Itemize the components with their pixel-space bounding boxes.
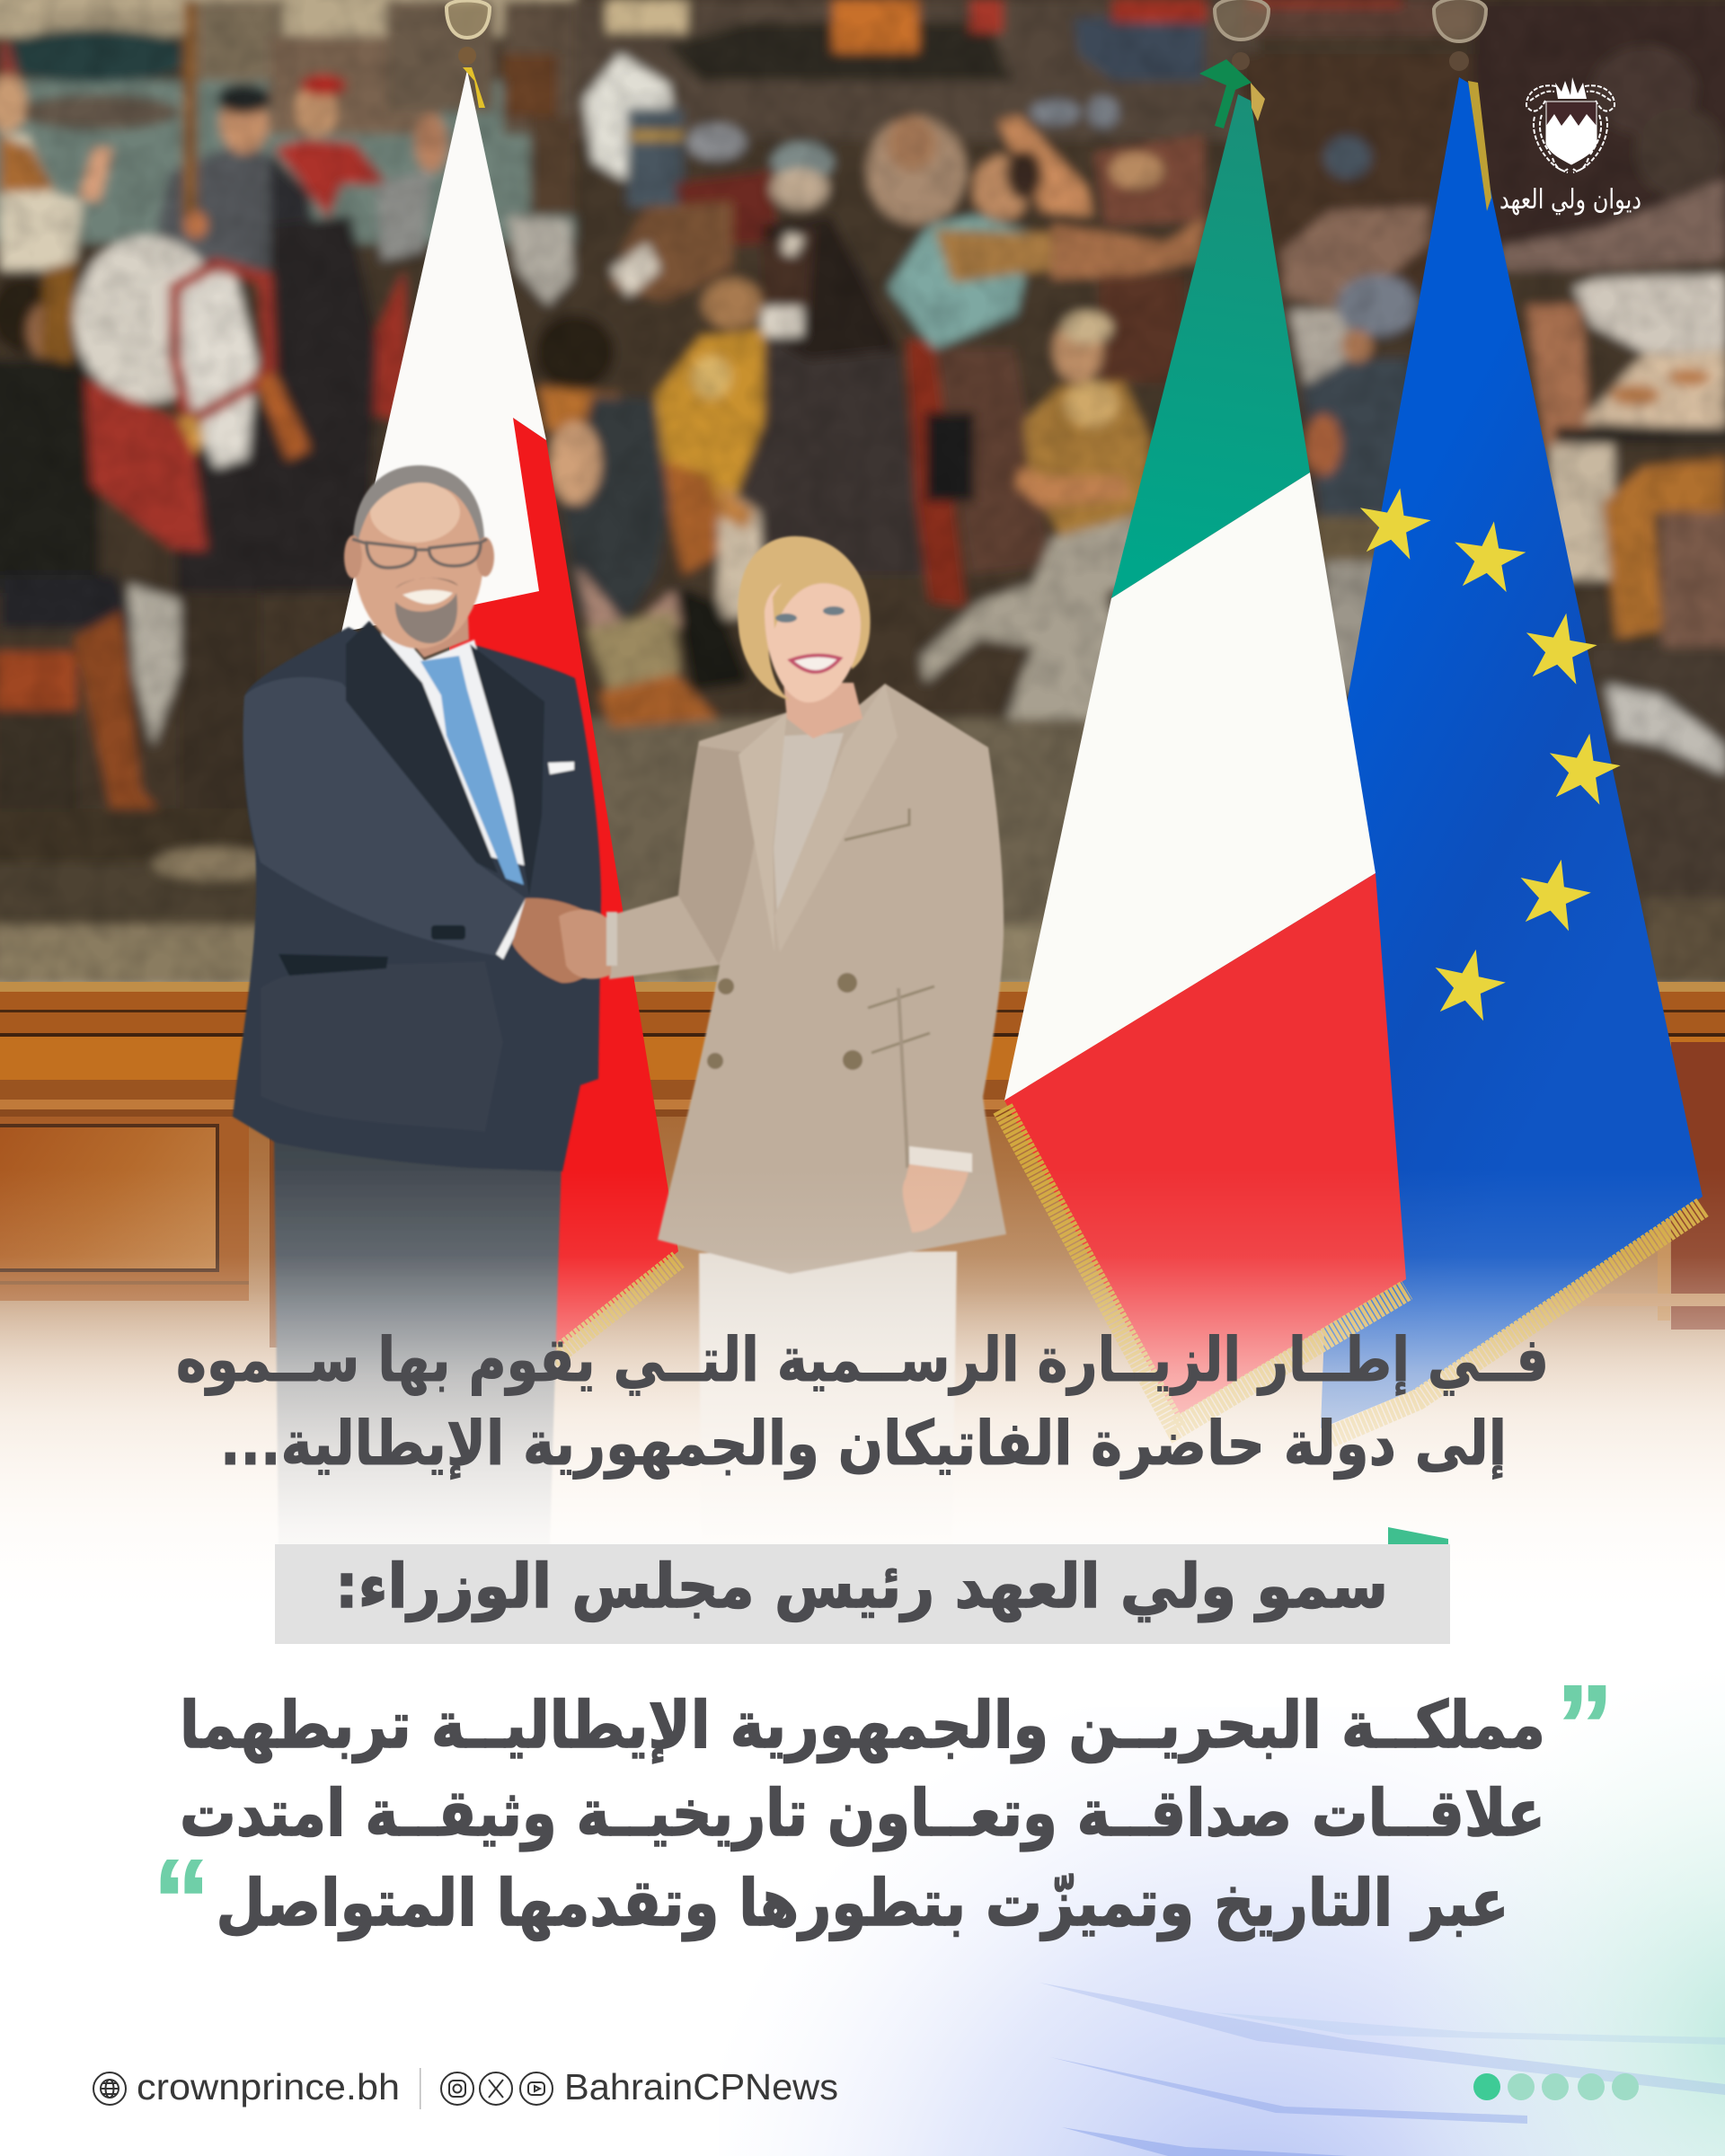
jacket — [609, 684, 1006, 1274]
footer contact: crownprince.bh — [137, 2066, 400, 2107]
painting: horses centre — [508, 202, 1051, 606]
stars — [1353, 482, 1625, 1024]
clasped hands — [512, 898, 609, 983]
wreath — [1526, 85, 1614, 172]
necktie — [420, 656, 524, 885]
quote mark opening: “ — [153, 1836, 210, 1965]
painting: white horse — [75, 236, 310, 467]
painting: floor — [0, 719, 1114, 988]
painting backdrop — [0, 0, 1725, 988]
logo: crown prince court: ديوان ولي العهد — [1499, 184, 1641, 216]
speaker heading bar — [275, 1527, 1450, 1644]
pockets — [845, 808, 934, 1053]
painting: dark shield figure — [535, 314, 750, 728]
flag: European Union — [1321, 0, 1703, 1437]
collar and shirt — [370, 597, 530, 867]
painting: red cloth and legs — [0, 377, 261, 853]
painting: grey and red men — [157, 0, 447, 422]
flag: Italy — [1003, 0, 1407, 1428]
quotation: مملكــة البحريــن والجمهورية الإيطاليــة تربطهما — [180, 1687, 1545, 1763]
speaker heading bar: سمو ولي العهد رئيس مجلس الوزراء: — [335, 1551, 1388, 1622]
fade overlay — [0, 1168, 1725, 1626]
trousers — [274, 1134, 562, 1545]
painting: teal cloth figure — [889, 216, 1204, 383]
painting: left landscape — [0, 0, 575, 243]
wood panel left — [0, 1117, 249, 1301]
face — [765, 575, 861, 702]
footer contact: BahrainCPNews — [564, 2066, 838, 2107]
painting: golden figure — [656, 278, 764, 620]
crown — [1555, 77, 1587, 99]
finial — [1434, 0, 1486, 71]
icon: x — [480, 2072, 512, 2105]
beard and smile — [395, 593, 457, 643]
finial — [1215, 0, 1269, 70]
lapels — [346, 621, 498, 873]
glasses — [352, 539, 487, 568]
painting: white rearing horse leg — [921, 512, 1159, 719]
painting: right horses — [1473, 0, 1725, 988]
lapels — [774, 684, 898, 952]
head — [354, 469, 483, 649]
finial — [447, 0, 490, 108]
painting: soldiers — [627, 96, 1204, 247]
trousers — [699, 1251, 957, 1545]
flag fringe — [1003, 1109, 1407, 1428]
sweater — [774, 733, 844, 948]
painting: pope figure — [0, 38, 112, 270]
wood panelling — [0, 982, 1725, 1620]
painting: left figure — [0, 261, 99, 593]
flag fringe — [1330, 1207, 1703, 1437]
intro text — [176, 1325, 1549, 1480]
icon: instagram — [441, 2072, 473, 2105]
shield — [1546, 102, 1597, 164]
cuff left — [606, 912, 617, 966]
hair — [738, 536, 871, 701]
painting canvas texture — [0, 0, 1725, 982]
cuff — [496, 898, 531, 959]
quote mark closing: ” — [1556, 1662, 1614, 1790]
quotation: عبر التاريخ وتميزّت بتطورها وتقدمها المتواصل — [216, 1865, 1509, 1941]
footer contact — [93, 2066, 838, 2109]
intro text: إلى دولة حاضرة الفاتيكان والجمهورية الإيطالية... — [220, 1409, 1507, 1480]
quotation: علاقــات صداقــة وتعــاون تاريخيــة وثيقــة امتدت — [180, 1775, 1545, 1851]
quotation — [153, 1662, 1614, 1965]
icon: globe — [93, 2072, 126, 2105]
page dots — [1473, 2073, 1639, 2100]
painting: between flags — [1240, 0, 1473, 692]
neck — [783, 683, 862, 738]
pocket square — [548, 762, 574, 774]
painting: blonde soldier — [1015, 312, 1150, 557]
buttons — [707, 973, 862, 1070]
flag fringe — [548, 1259, 678, 1362]
clasping hand — [559, 910, 613, 979]
bottom background glow — [719, 1617, 1725, 2156]
person: woman in beige suit — [559, 536, 1006, 1545]
suit jacket — [233, 627, 601, 1171]
painting: top centre — [503, 0, 1258, 180]
decorative streaks — [1039, 1983, 1725, 2095]
icon: youtube — [520, 2072, 553, 2105]
flag: Bahrain — [341, 0, 678, 1362]
ribbon — [1199, 59, 1252, 128]
person: man in dark suit — [233, 465, 609, 1545]
painting: dark horse left — [175, 216, 377, 593]
neck — [373, 593, 469, 658]
cuff and hand — [909, 1146, 972, 1172]
logo: crown prince court — [1499, 77, 1641, 216]
